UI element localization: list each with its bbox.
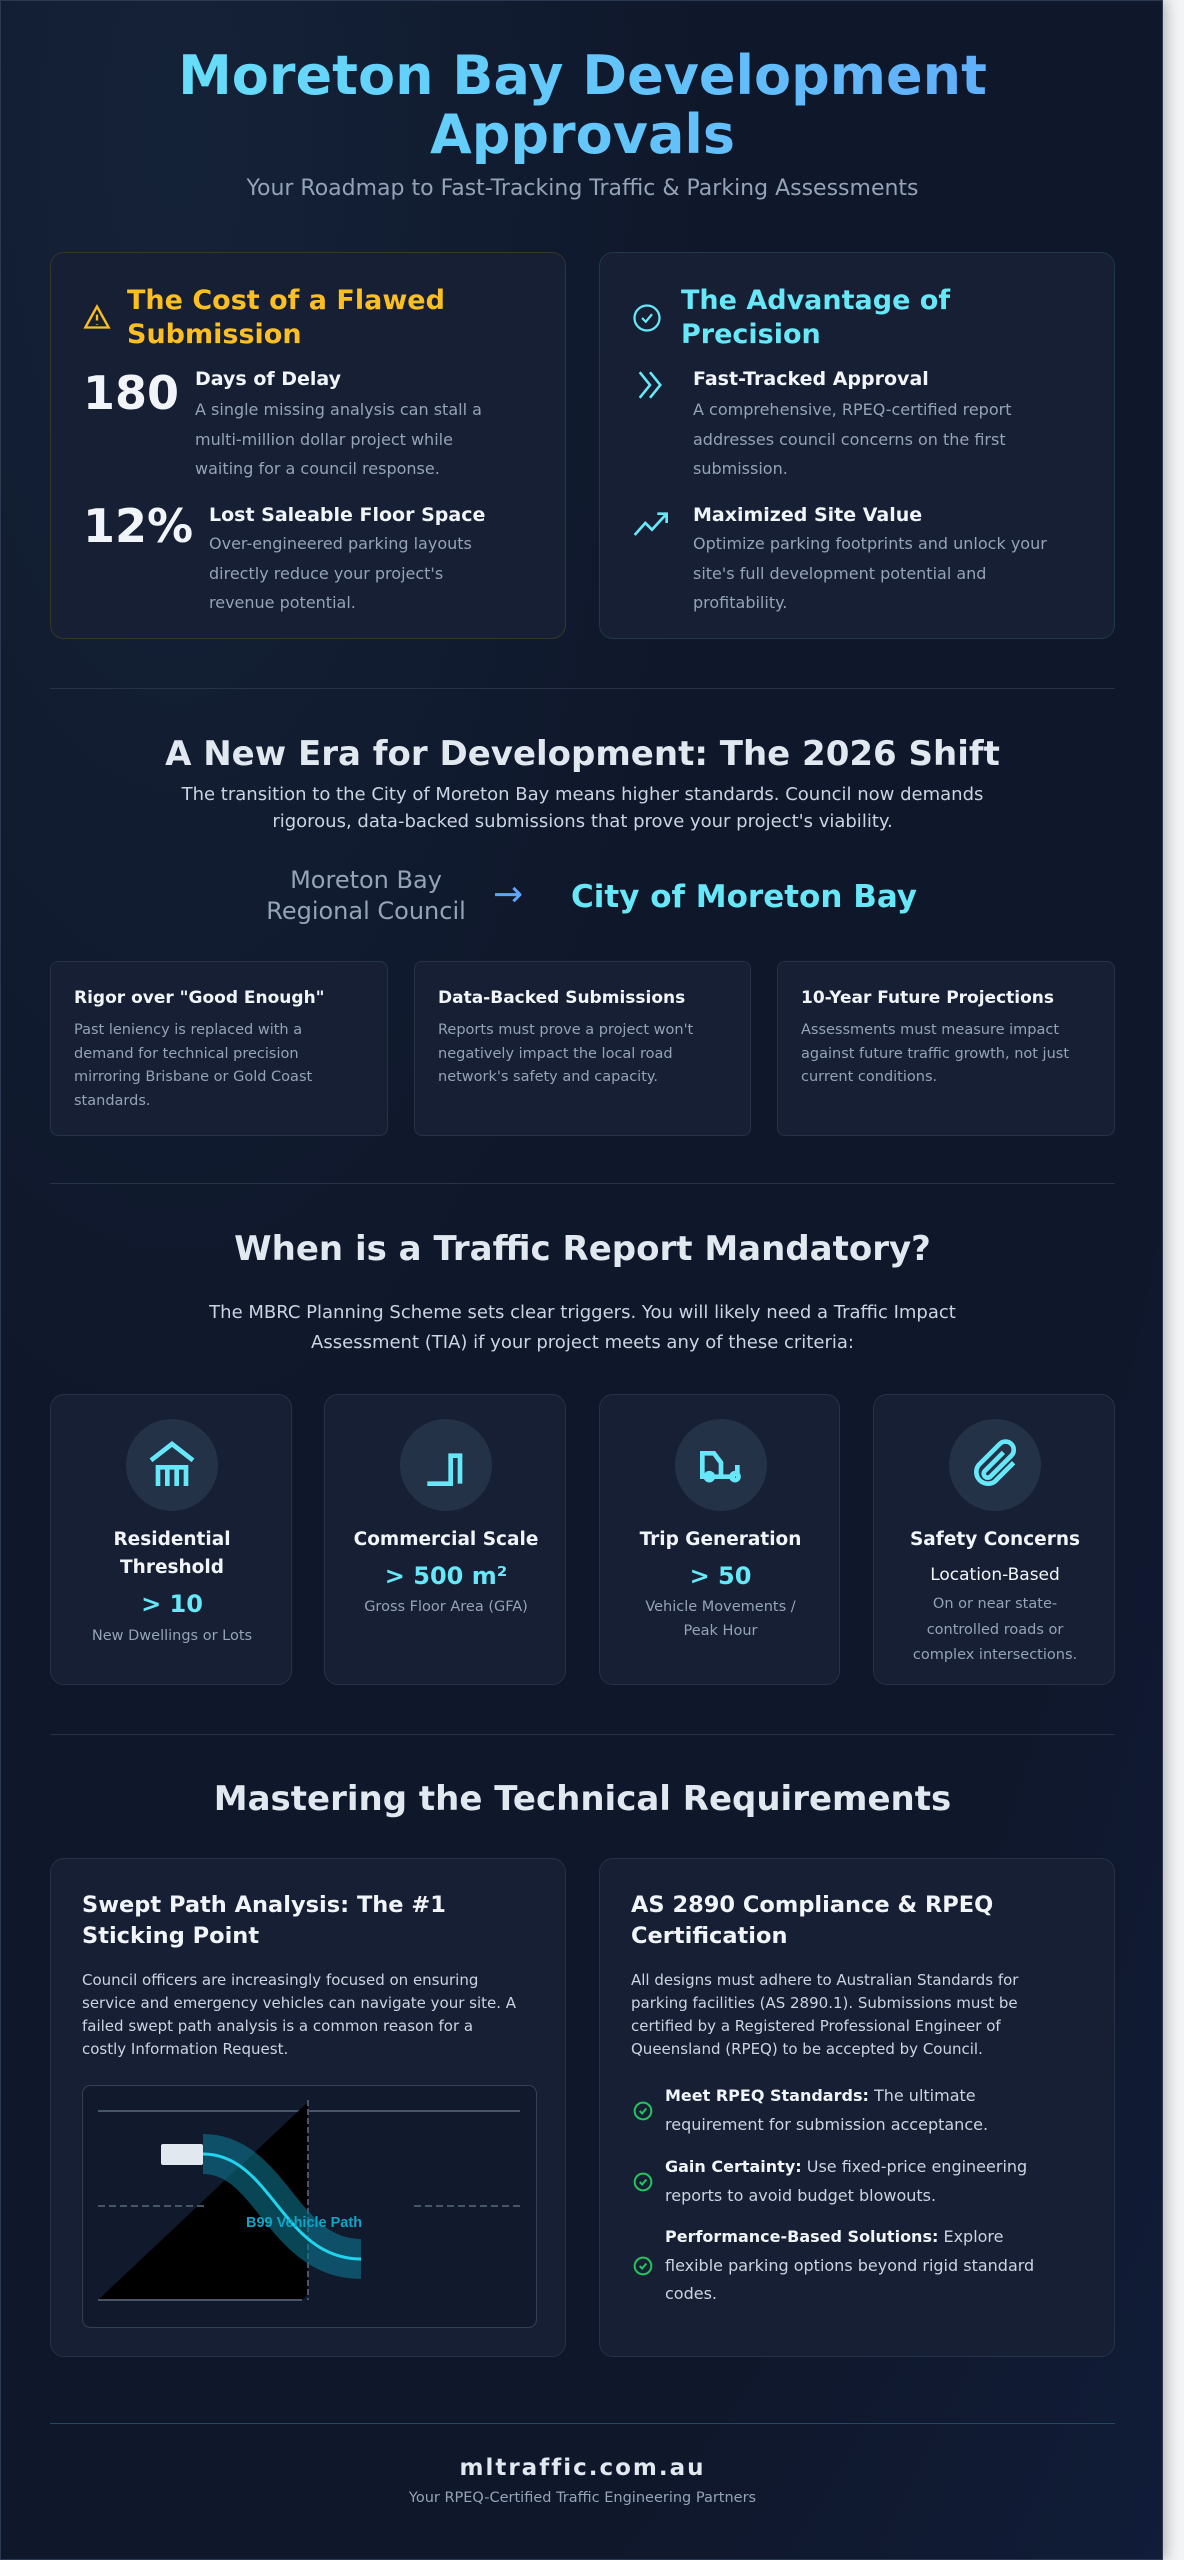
stat: 180 days <box>83 366 482 478</box>
stat: 12%: Lost Saleable Floor Space <box>209 504 485 526</box>
stat: 180 days: 180 <box>83 366 179 420</box>
paragraph: transition: The transition to the City of Moreton Bay means higher standards. Council now demands <box>182 784 983 805</box>
list item: performance <box>634 2227 1034 2303</box>
icon: vehicle <box>675 1419 767 1511</box>
panel: AS 2890: Queensland (RPEQ) to be accepted by Council. <box>631 2040 983 2058</box>
heading: Submission <box>127 319 302 350</box>
panel: swept path: costly Information Request. <box>82 2040 288 2058</box>
icon: check circle <box>633 304 661 332</box>
stat: 180 days: waiting for a council response. <box>195 459 440 478</box>
list item: performance: flexible parking options beyond rigid standard <box>665 2256 1034 2274</box>
panel: swept path: Sticking Point <box>82 1923 259 1949</box>
item: fast-tracked: Fast-Tracked Approval <box>693 368 929 390</box>
panel: swept path: service and emergency vehicles can navigate your site. A <box>82 1994 516 2012</box>
panel: swept path: failed swept path analysis is a common reason for a <box>82 2017 473 2035</box>
paragraph: triggers <box>209 1302 956 1353</box>
heading: The Cost of a Flawed <box>127 285 445 316</box>
list item: certainty: reports to avoid budget blowouts. <box>665 2186 936 2204</box>
stat: 180 days: A single missing analysis can stall a <box>195 400 482 419</box>
transition diagram: City of Moreton Bay <box>571 879 917 915</box>
panel: AS 2890 <box>599 1858 1115 2357</box>
card: projections: current conditions. <box>801 1069 937 1085</box>
list item: RPEQ <box>634 2086 988 2134</box>
icon: building <box>400 1419 492 1511</box>
panel: advantage of precision <box>599 252 1115 639</box>
heading: Precision <box>681 319 821 350</box>
transition diagram: Moreton Bay <box>290 866 442 894</box>
card: data-backed: network's safety and capacity. <box>438 1069 658 1085</box>
item: fast-tracked: submission. <box>693 459 788 478</box>
list item: performance: codes. <box>665 2284 717 2303</box>
card: safety: On or near state- <box>933 1596 1057 1612</box>
list item: RPEQ: Meet RPEQ Standards: The ultimate <box>665 2086 976 2105</box>
paragraph: transition: rigorous, data-backed submissions that prove your project's viability. <box>272 811 893 832</box>
stat: 12%: revenue potential. <box>209 593 356 612</box>
heading <box>127 285 445 350</box>
panel: swept path: Council officers are increasingly focused on ensuring <box>82 1971 478 1989</box>
card: safety: controlled roads or <box>927 1622 1063 1638</box>
stat: 180 days: multi-million dollar project while <box>195 430 453 448</box>
panel: AS 2890: certified by a Registered Professional Engineer of <box>631 2017 1001 2035</box>
card: rigor: Past leniency is replaced with a <box>74 1022 302 1038</box>
diagram: swept path: B99 Vehicle Path <box>246 2215 362 2231</box>
card: safety: complex intersections. <box>913 1647 1077 1663</box>
icon: house <box>126 1419 218 1511</box>
card: data-backed <box>414 961 751 1136</box>
title: Approvals <box>430 103 735 166</box>
paragraph: triggers: The MBRC Planning Scheme sets clear triggers. You will likely need a Traffic Impact <box>209 1302 956 1323</box>
card: projections <box>777 961 1115 1136</box>
card: rigor: standards. <box>74 1092 150 1108</box>
item: fast-tracked <box>638 368 1012 478</box>
card: projections: Assessments must measure impact <box>801 1022 1059 1038</box>
transition diagram <box>266 866 917 925</box>
subtitle: Your Roadmap to Fast-Tracking Traffic & Parking Assessments <box>246 176 919 201</box>
footer <box>408 2455 756 2506</box>
stat: 12%: directly reduce your project's <box>209 564 443 582</box>
diagram: swept path <box>82 2085 537 2328</box>
list item: certainty: Gain Certainty: Use fixed-price engineering <box>665 2157 1027 2176</box>
card: residential: New Dwellings or Lots <box>92 1628 252 1644</box>
card: commercial <box>324 1394 566 1685</box>
list item: performance: Performance-Based Solutions: Explore <box>665 2227 1004 2246</box>
card: rigor <box>50 961 388 1136</box>
card: residential: Residential <box>113 1529 231 1550</box>
card: safety <box>873 1394 1115 1685</box>
item: maximized value: Optimize parking footprints and unlock your <box>693 534 1047 553</box>
item: maximized value: profitability. <box>693 593 787 612</box>
card: residential: Threshold <box>120 1557 224 1578</box>
heading: new era: A New Era for Development: The 2026 Shift <box>165 734 1000 774</box>
card: trip generation: Peak Hour <box>684 1623 757 1639</box>
heading: technical: Mastering the Technical Requirements <box>214 1779 951 1819</box>
card: rigor: demand for technical precision <box>74 1046 299 1062</box>
card: trip generation: > 50 <box>690 1562 751 1590</box>
transition diagram: Regional Council <box>266 897 466 925</box>
card: data-backed: negatively impact the local road <box>438 1046 673 1062</box>
title: Moreton Bay Development <box>178 44 987 107</box>
stat: 12%: Over-engineered parking layouts <box>209 534 472 553</box>
panel: AS 2890: All designs must adhere to Australian Standards for <box>631 1971 1018 1989</box>
stat: 12%: 12% <box>83 499 193 553</box>
paragraph: transition <box>182 784 983 832</box>
stat: 12% <box>83 499 485 612</box>
paragraph: triggers: Assessment (TIA) if your project meets any of these criteria: <box>311 1332 854 1353</box>
list item: RPEQ: requirement for submission acceptance. <box>665 2114 988 2134</box>
panel: AS 2890: parking facilities (AS 2890.1). Submissions must be <box>631 1994 1018 2012</box>
card: commercial: Commercial Scale <box>354 1529 538 1550</box>
item: fast-tracked: A comprehensive, RPEQ-certified report <box>693 400 1011 419</box>
list item: certainty <box>634 2157 1027 2204</box>
heading: mandatory: When is a Traffic Report Mandatory? <box>234 1229 931 1269</box>
stat: 180 days: Days of Delay <box>195 368 341 390</box>
card: trip generation: Trip Generation <box>640 1529 801 1550</box>
card: trip generation: Vehicle Movements / <box>645 1599 796 1615</box>
item: maximized value: Maximized Site Value <box>693 504 922 526</box>
panel: swept path: Swept Path Analysis: The #1 <box>82 1892 446 1918</box>
panel: AS 2890: AS 2890 Compliance & RPEQ <box>631 1892 993 1918</box>
card: rigor: mirroring Brisbane or Gold Coast <box>74 1069 312 1085</box>
card: trip generation <box>599 1394 840 1685</box>
heading: The Advantage of <box>681 285 950 316</box>
card: projections: against future traffic growth, not just <box>801 1046 1069 1062</box>
card: data-backed: Reports must prove a project won't <box>438 1022 693 1038</box>
title <box>1 46 1164 164</box>
panel: cost of flawed submission <box>50 252 566 639</box>
footer: mltraffic.com.au <box>459 2455 706 2481</box>
panel: AS 2890: Certification <box>631 1923 787 1949</box>
card: projections: 10-Year Future Projections <box>801 988 1054 1008</box>
arrow: → <box>493 874 523 915</box>
card: residential: > 10 <box>141 1590 203 1618</box>
panel: swept path <box>50 1858 566 2357</box>
item: fast-tracked: addresses council concerns on the first <box>693 430 1006 448</box>
card: residential <box>50 1394 292 1685</box>
card: data-backed: Data-Backed Submissions <box>438 988 685 1008</box>
item: maximized value <box>634 504 1047 612</box>
item: maximized value: site's full development potential and <box>693 564 986 582</box>
heading <box>681 285 950 350</box>
card: safety: Safety Concerns <box>910 1529 1080 1550</box>
footer: Your RPEQ-Certified Traffic Engineering Partners <box>409 2490 756 2506</box>
card: rigor: Rigor over "Good Enough" <box>74 988 325 1008</box>
card: safety: Location-Based <box>930 1565 1060 1585</box>
icon: warning <box>83 304 111 329</box>
card: commercial: Gross Floor Area (GFA) <box>364 1599 528 1615</box>
icon: paperclip <box>949 1419 1041 1511</box>
card: commercial: > 500 m² <box>385 1562 507 1590</box>
